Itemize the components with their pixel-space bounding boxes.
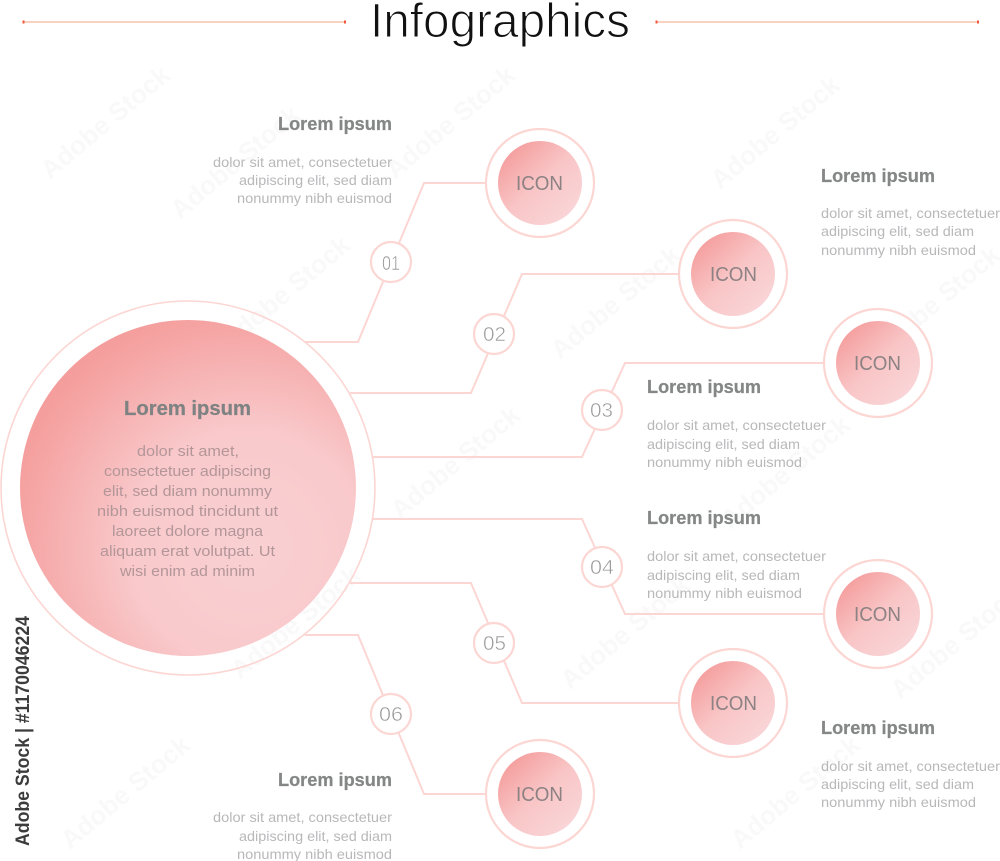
text block 03: Lorem ipsum [647, 377, 761, 397]
text block 01: Lorem ipsum [278, 114, 392, 134]
watermark: Adobe Stock [555, 569, 696, 695]
text block 06: dolor sit amet, consectetuer [213, 809, 392, 825]
connector 01 [305, 183, 486, 342]
central body text: laoreet dolore magna [112, 523, 264, 540]
number badge 02: 02 [483, 324, 506, 346]
text block 06: adipiscing elit, sed diam [239, 828, 392, 844]
stock id label: Adobe Stock | #1170046224 [13, 616, 34, 846]
text block 01: nonummy nibh euismod [237, 190, 392, 206]
central body text: elit, sed diam nonummy [103, 483, 273, 500]
text block 04: adipiscing elit, sed diam [647, 567, 800, 583]
number badge 06: 06 [379, 704, 403, 726]
title rule left [22, 20, 346, 24]
number badge 05 [474, 623, 514, 663]
text block 04 [647, 508, 826, 601]
watermark: Adobe Stock [225, 559, 366, 685]
central body text [97, 443, 279, 580]
icon node 04 [824, 560, 932, 668]
watermark: Adobe Stock [55, 729, 196, 855]
text block 06: Lorem ipsum [278, 770, 392, 790]
text block 02 [821, 166, 1000, 258]
text block 01 [213, 114, 392, 206]
icon node 06 [486, 740, 594, 848]
icon node 02: ICON [710, 264, 757, 286]
watermark: Adobe Stock [545, 239, 686, 365]
central body text: wisi enim ad minim [119, 563, 255, 580]
number badge 01 [371, 242, 411, 282]
number badge 05: 05 [483, 633, 506, 655]
central body text: nibh euismod tincidunt ut [97, 503, 279, 520]
text block 02: nonummy nibh euismod [821, 242, 976, 258]
number badge 03 [582, 390, 622, 430]
icon node 01 [486, 129, 594, 237]
number badge 06 [371, 694, 411, 734]
watermark: Adobe Stock [385, 399, 526, 525]
central body text: dolor sit amet, [137, 443, 239, 460]
icon node 05: ICON [710, 693, 757, 715]
watermark: Adobe Stock [725, 729, 866, 855]
text block 04: Lorem ipsum [647, 508, 761, 528]
text block 05: Lorem ipsum [821, 718, 935, 738]
text block 02: dolor sit amet, consectetuer [821, 205, 1000, 221]
central heading: Lorem ipsum [124, 398, 251, 420]
text block 03: adipiscing elit, sed diam [647, 436, 800, 452]
icon node 03 [824, 309, 932, 417]
text block 03 [647, 377, 826, 470]
text block 02: adipiscing elit, sed diam [821, 223, 974, 239]
text block 02: Lorem ipsum [821, 166, 935, 186]
text block 05: adipiscing elit, sed diam [821, 776, 974, 792]
connector 04 [373, 519, 824, 614]
title rule right [656, 20, 979, 24]
connector 03 [373, 363, 824, 457]
text block 06 [213, 770, 392, 861]
icon node 06: ICON [516, 784, 563, 806]
connector 05 [350, 583, 680, 703]
text block 05: dolor sit amet, consectetuer [821, 758, 1000, 774]
text block 01: dolor sit amet, consectetuer [213, 154, 392, 170]
watermark: Adobe Stock [215, 229, 356, 355]
watermark: Adobe Stock [715, 409, 856, 535]
text block 01: adipiscing elit, sed diam [239, 172, 392, 188]
text block 05: nonummy nibh euismod [821, 794, 976, 810]
icon node 05 [679, 649, 787, 757]
number badge 02 [474, 314, 514, 354]
watermark: Adobe Stock [705, 69, 846, 195]
connector 06 [305, 635, 486, 794]
watermark: Adobe Stock [380, 59, 521, 185]
number badge 01: 01 [382, 253, 400, 275]
text block 04: nonummy nibh euismod [647, 585, 802, 601]
panel: central circle [1, 301, 375, 675]
central body text: aliquam erat volutpat. Ut [100, 543, 276, 560]
text block 04: dolor sit amet, consectetuer [647, 548, 826, 564]
icon node 03: ICON [854, 353, 901, 375]
number badge 04 [582, 547, 622, 587]
text block 03: dolor sit amet, consectetuer [647, 417, 826, 433]
number badge 03: 03 [590, 400, 613, 422]
watermark: Adobe Stock [165, 99, 306, 225]
text block 03: nonummy nibh euismod [647, 454, 802, 470]
icon node 01: ICON [516, 173, 563, 195]
number badge 04: 04 [590, 557, 614, 579]
icon node 04: ICON [854, 604, 901, 626]
connector 02 [350, 274, 680, 393]
central body text: consectetuer adipiscing [104, 463, 271, 480]
watermark: Adobe Stock [35, 59, 176, 185]
text block 05 [821, 718, 1000, 810]
icon node 02 [679, 220, 787, 328]
